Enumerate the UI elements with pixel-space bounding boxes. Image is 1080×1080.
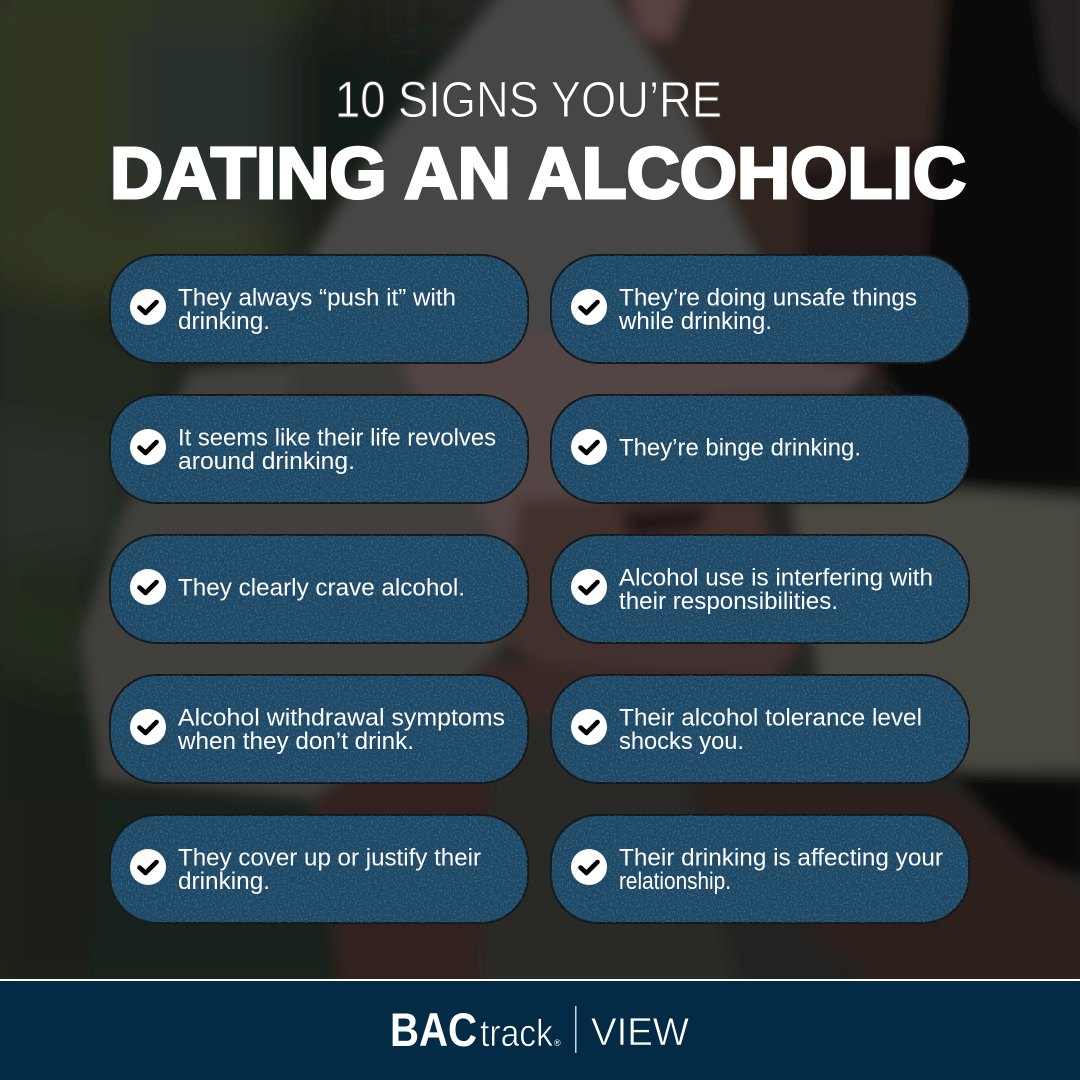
- sign 1: They always “push it” with: [178, 284, 456, 312]
- sign 7: [551, 395, 969, 503]
- sign 1: drinking.: [178, 308, 270, 335]
- sign 6: while drinking.: [618, 308, 772, 335]
- sign 10: relationship.: [619, 868, 731, 895]
- sign 9: Their alcohol tolerance level: [619, 704, 922, 732]
- sign 1: [110, 255, 528, 363]
- logo: BACtrack: BAC: [390, 1003, 477, 1056]
- sign 5: They cover up or justify their: [178, 844, 481, 872]
- sign 8: Alcohol use is interfering with: [619, 564, 933, 592]
- logo: BACtrack: track: [480, 1013, 554, 1055]
- sign 8: [551, 535, 969, 643]
- sign 4: Alcohol withdrawal symptoms: [178, 704, 505, 732]
- panel: left column of signs: [110, 255, 528, 923]
- sign 4: when they don’t drink.: [177, 728, 414, 755]
- title: [110, 71, 966, 214]
- sign 2: [110, 395, 528, 503]
- sign 9: shocks you.: [619, 728, 744, 755]
- logo: BACtrack: ®: [554, 1038, 561, 1048]
- sign 9: [551, 675, 969, 783]
- sign 10: Their drinking is affecting your: [619, 844, 943, 872]
- sign 6: They’re doing unsafe things: [619, 284, 917, 312]
- main heading: DATING AN ALCOHOLIC: [110, 134, 966, 214]
- logo: BACtrack: [390, 1003, 561, 1056]
- sign 2: It seems like their life revolves: [178, 424, 496, 452]
- sign 5: drinking.: [178, 868, 270, 895]
- sign 5: [110, 815, 528, 923]
- sign 4: [110, 675, 528, 783]
- sign 8: their responsibilities.: [619, 588, 838, 615]
- subtitle line: 10 SIGNS YOU’RE: [335, 71, 722, 128]
- panel: right column of signs: [551, 255, 969, 923]
- sign 3: [110, 535, 528, 643]
- sign 2: around drinking.: [178, 448, 355, 475]
- footer band with logo: [0, 979, 1080, 1080]
- logo: VIEW: VIEW: [591, 1011, 689, 1054]
- sign 6: [551, 255, 969, 363]
- sign 7: They’re binge drinking.: [619, 434, 861, 462]
- sign 10: [551, 815, 969, 923]
- sign 3: They clearly crave alcohol.: [178, 574, 465, 602]
